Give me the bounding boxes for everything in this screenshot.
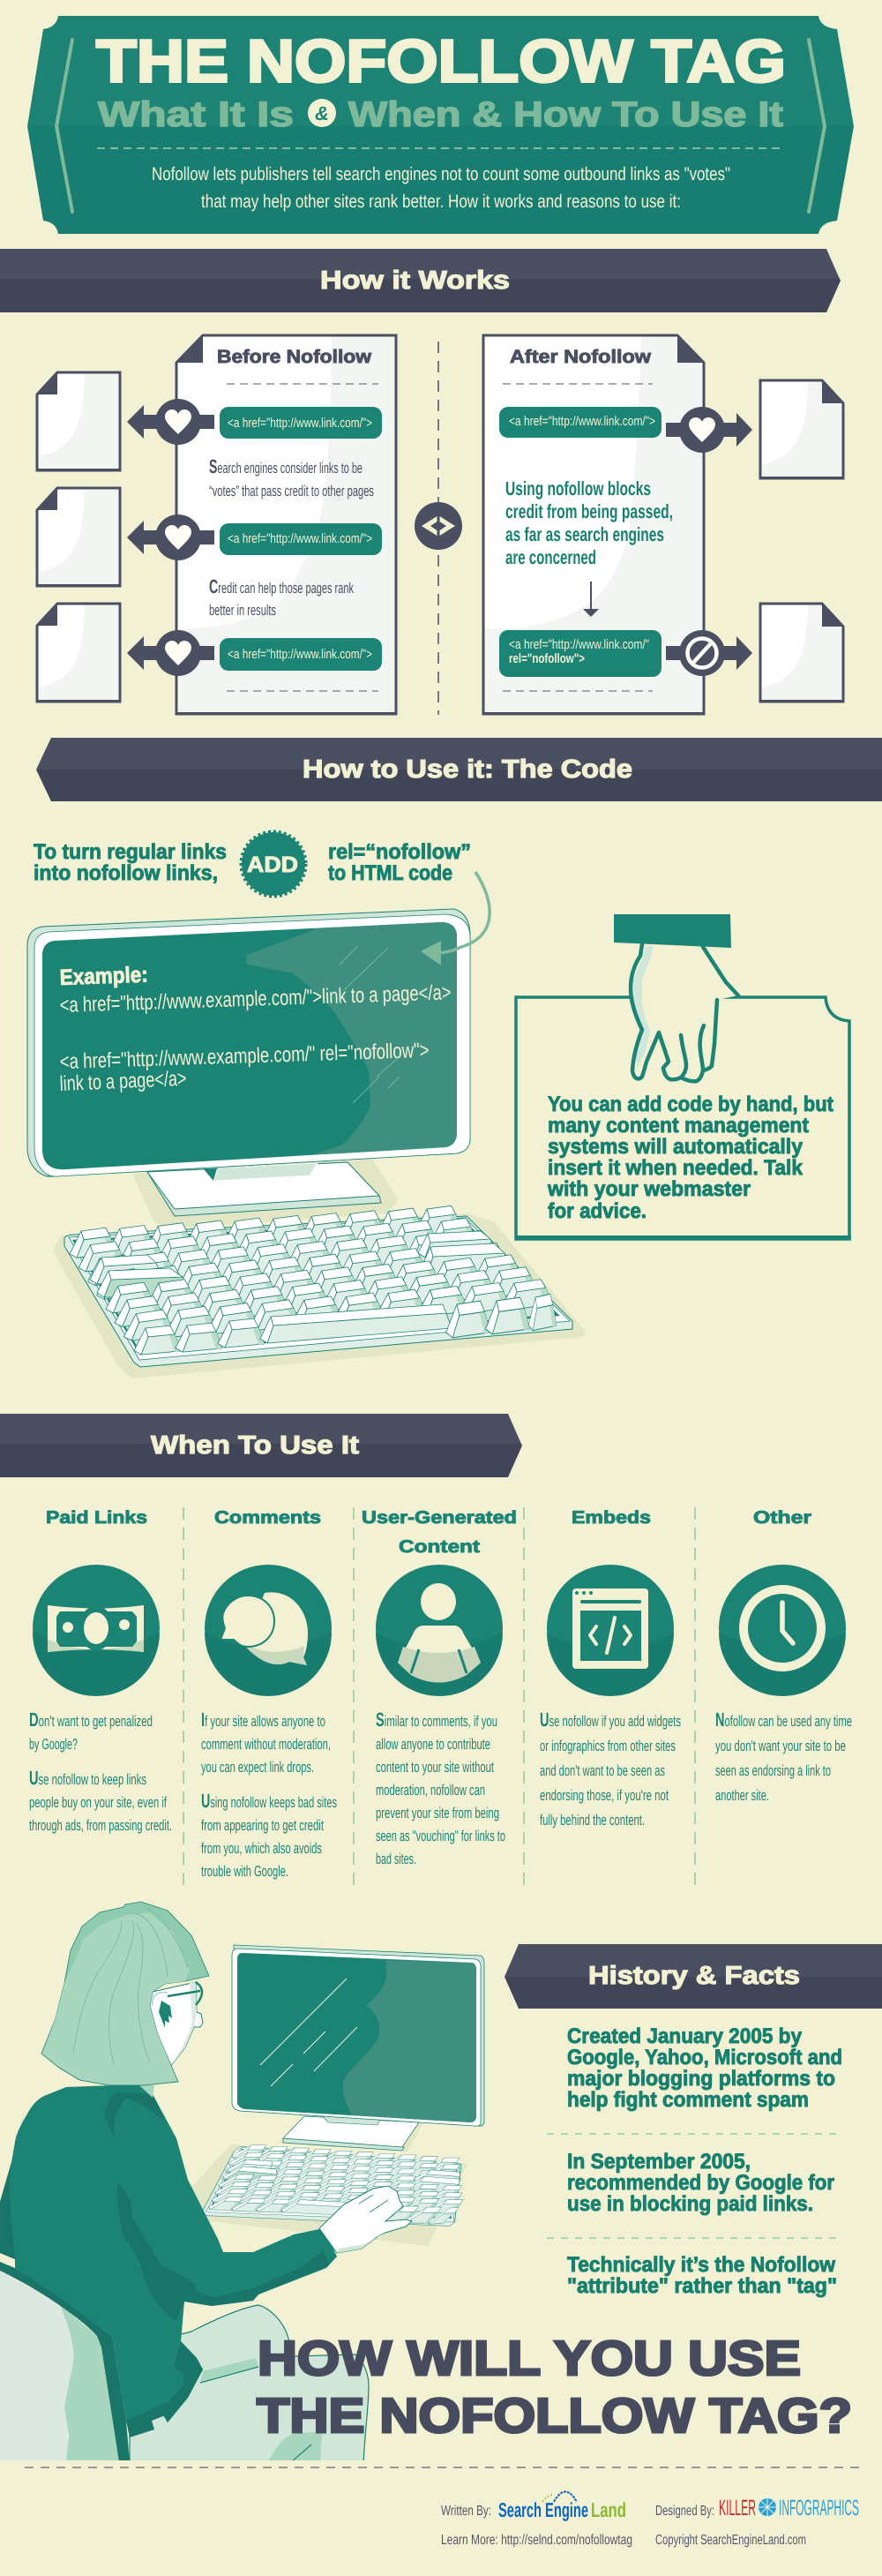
icon: money xyxy=(33,1565,160,1696)
fact 1: major blogging platforms to xyxy=(567,2067,835,2091)
description: Using nofollow keeps bad sites xyxy=(201,1790,337,1812)
column: comments xyxy=(201,1508,337,1880)
section band: History & Facts xyxy=(505,1944,882,2009)
panel: after nofollow xyxy=(482,335,705,715)
neck xyxy=(139,2085,154,2098)
explanation 1: “votes” that pass credit to other pages xyxy=(209,483,374,499)
torso and arm xyxy=(0,2084,337,2422)
icon: blocked arrow right xyxy=(666,630,752,676)
icon: hand xyxy=(614,914,738,1081)
heading: After Nofollow xyxy=(510,347,652,367)
code box 3: <a href="http://www.link.com/"> xyxy=(228,647,372,662)
fact 1: help fight comment spam xyxy=(567,2088,809,2112)
hair xyxy=(41,1902,209,2085)
intro text xyxy=(152,164,730,212)
small monitor xyxy=(232,1945,484,2152)
chair and legs xyxy=(0,2262,369,2467)
heading: Embeds xyxy=(572,1508,651,1528)
description: and don't want to be seen as xyxy=(540,1762,665,1779)
code box 1: <a href="http://www.link.com/"> xyxy=(228,416,372,431)
heading: Before Nofollow xyxy=(217,347,372,367)
section band: History & Facts: History & Facts xyxy=(588,1962,800,1990)
icon: embed window xyxy=(547,1565,674,1696)
subtitle: When & How To Use It xyxy=(348,95,783,134)
description xyxy=(29,1709,172,1834)
nofollow code box: rel="nofollow"> xyxy=(509,651,585,666)
explanation 2: Credit can help those pages rank xyxy=(209,575,354,597)
intro text: Nofollow lets publishers tell search engines not to count some outbound links as "votes" xyxy=(152,164,730,184)
fact 1 xyxy=(567,2024,842,2112)
description: you can expect link drops. xyxy=(201,1759,314,1776)
column: other xyxy=(715,1508,852,1804)
heading: Comments xyxy=(214,1508,321,1528)
keyboard xyxy=(53,1205,587,1378)
small keyboard xyxy=(163,2131,523,2246)
ampersand badge: & xyxy=(315,102,329,124)
icon: code comparison xyxy=(415,502,462,550)
logo: search engine land: Search Engine xyxy=(498,2498,588,2521)
explanation: credit from being passed, xyxy=(505,500,673,522)
footer credits xyxy=(441,2492,859,2548)
logo: search engine land: Land xyxy=(591,2498,626,2521)
fact 3: "attribute" rather than "tag" xyxy=(567,2274,837,2298)
learn more: Learn More: http://selnd.com/nofollowtag xyxy=(441,2533,632,2548)
column: embeds xyxy=(540,1508,681,1829)
description: content to your site without xyxy=(376,1759,494,1776)
section band: When To Use It: When To Use It xyxy=(151,1431,359,1460)
code box: <a href="http://www.link.com/"> xyxy=(509,414,655,429)
description: endorsing those, if you're not xyxy=(540,1787,669,1804)
note text: many content management xyxy=(548,1114,809,1138)
note text: insert it when needed. Talk xyxy=(548,1156,804,1180)
note text: You can add code by hand, but xyxy=(548,1093,833,1116)
subtitle: What It Is xyxy=(98,95,294,134)
fact 2: recommended by Google for xyxy=(567,2171,834,2195)
explanation: as far as search engines xyxy=(505,523,664,545)
section band: How it Works xyxy=(0,249,841,312)
heading xyxy=(362,1508,517,1557)
description xyxy=(540,1709,681,1829)
description: Use nofollow if you add widgets xyxy=(540,1709,681,1731)
icon: speech bubbles xyxy=(205,1565,332,1696)
description: people buy on your site, even if xyxy=(29,1794,167,1811)
note text: systems will automatically xyxy=(548,1135,804,1159)
ADD badge: ADD xyxy=(247,852,298,877)
description xyxy=(201,1709,337,1880)
logo: killer infographics xyxy=(719,2496,859,2520)
designed by: Designed By: xyxy=(655,2504,714,2519)
description: from you, which also avoids xyxy=(201,1840,322,1857)
nofollow code box xyxy=(499,630,662,677)
code example: <a href="http://www.example.com/">link to a page</a> xyxy=(59,980,452,1018)
curved arrow xyxy=(421,872,490,965)
title banner xyxy=(27,16,854,234)
code example: <a href="http://www.example.com/" rel="nofollow"> xyxy=(59,1039,430,1074)
explanation xyxy=(505,477,673,568)
face xyxy=(150,1982,203,2067)
icon: heart arrow 3 xyxy=(127,630,214,676)
code example: Example: xyxy=(59,963,148,990)
nofollow code box: <a href="http://www.link.com/" xyxy=(509,637,649,652)
description: comment without moderation, xyxy=(201,1736,331,1753)
intro text: that may help other sites rank better. How it works and reasons to use it: xyxy=(201,192,681,212)
instruction text left: into nofollow links, xyxy=(34,861,218,885)
code box xyxy=(499,407,662,438)
description: by Google? xyxy=(29,1736,78,1753)
fact 1: Google, Yahoo, Microsoft and xyxy=(567,2046,842,2069)
note text: with your webmaster xyxy=(547,1177,751,1201)
screen xyxy=(42,922,457,1169)
stand xyxy=(278,2114,423,2152)
subtitle xyxy=(98,95,783,134)
copyright: Copyright SearchEngineLand.com xyxy=(655,2533,806,2548)
callout: hand with note xyxy=(515,914,851,1240)
linked page right 2 xyxy=(759,604,844,702)
hand xyxy=(319,2186,412,2253)
instruction text left: To turn regular links xyxy=(34,840,227,864)
stand xyxy=(132,1156,399,1228)
ampersand badge xyxy=(308,99,336,127)
code box 1 xyxy=(220,407,382,439)
arrow down xyxy=(583,582,599,617)
description: bad sites. xyxy=(376,1851,416,1867)
instruction text right: rel=“nofollow” xyxy=(328,840,471,864)
sweater folds xyxy=(0,2092,329,2437)
code example: link to a page</a> xyxy=(59,1067,187,1096)
monitor xyxy=(27,909,470,1228)
linked page 2 xyxy=(36,488,121,587)
instruction text right xyxy=(328,840,471,885)
explanation 2: better in results xyxy=(209,602,276,619)
description: or infographics from other sites xyxy=(540,1738,676,1754)
section band: When To Use It xyxy=(0,1414,522,1477)
heading: User-Generated xyxy=(362,1508,517,1528)
description: Use nofollow to keep links xyxy=(29,1767,146,1789)
description: allow anyone to contribute xyxy=(376,1736,490,1753)
logo: killer infographics: KILLER xyxy=(719,2496,756,2520)
code box 3 xyxy=(220,638,382,671)
explanation: are concerned xyxy=(505,546,596,568)
section band: How to Use it: How to Use it: The Code xyxy=(303,755,632,784)
glasses xyxy=(168,1982,202,2005)
explanation 2 xyxy=(209,575,354,619)
closing question: HOW WILL YOU USE xyxy=(258,2331,801,2385)
written by: Written By: xyxy=(441,2504,491,2519)
explanation 1 xyxy=(209,455,374,499)
fact 3 xyxy=(567,2253,837,2298)
screen xyxy=(237,1953,476,2122)
fact 2: use in blocking paid links. xyxy=(567,2192,813,2216)
column: paid links xyxy=(29,1508,172,1834)
panel: before nofollow xyxy=(176,335,397,715)
section band: How it Works: How it Works xyxy=(320,267,510,295)
heading: Other xyxy=(753,1508,811,1528)
description: trouble with Google. xyxy=(201,1863,288,1880)
code box 2: <a href="http://www.link.com/"> xyxy=(228,531,372,546)
illustration: woman at computer xyxy=(0,1902,412,2467)
linked page 3 xyxy=(36,604,121,702)
description: from appearing to get credit xyxy=(201,1817,324,1834)
icon: heart arrow right xyxy=(666,407,752,453)
note text xyxy=(547,1093,833,1223)
fact 1: Created January 2005 by xyxy=(567,2024,803,2048)
explanation 1: Search engines consider links to be xyxy=(209,455,363,477)
linked page right 1 xyxy=(759,380,844,479)
description: another site. xyxy=(715,1787,769,1804)
explanation: Using nofollow blocks xyxy=(505,477,651,499)
description: fully behind the content. xyxy=(540,1812,645,1829)
description: If your site allows anyone to xyxy=(201,1709,325,1731)
code example xyxy=(59,963,452,1096)
description: moderation, nofollow can xyxy=(376,1782,485,1799)
icon: person xyxy=(376,1565,503,1696)
code box 2 xyxy=(220,523,382,555)
linked page 1 xyxy=(36,372,121,471)
fact 2: In September 2005, xyxy=(567,2150,751,2174)
ADD badge xyxy=(241,831,306,897)
icon: heart arrow 1 xyxy=(127,399,214,445)
heading: Paid Links xyxy=(46,1508,147,1528)
icon: heart arrow 2 xyxy=(127,514,214,560)
description: Similar to comments, if you xyxy=(376,1709,497,1731)
description xyxy=(715,1709,852,1804)
closing question: THE NOFOLLOW TAG? xyxy=(257,2388,852,2443)
instruction text right: to HTML code xyxy=(328,861,452,885)
note text: for advice. xyxy=(548,1199,647,1223)
description: prevent your site from being xyxy=(376,1805,499,1821)
icon: clock xyxy=(719,1565,846,1696)
fact 3: Technically it’s the Nofollow xyxy=(567,2253,835,2277)
section band: How to Use it xyxy=(36,738,882,801)
title: THE NOFOLLOW TAG xyxy=(96,28,786,95)
column: user-generated content xyxy=(362,1508,517,1867)
instruction text left xyxy=(34,840,227,885)
description: Don't want to get penalized xyxy=(29,1709,153,1731)
description xyxy=(376,1709,505,1867)
fact 2 xyxy=(567,2150,834,2216)
heading: Content xyxy=(399,1537,480,1557)
closing question xyxy=(257,2331,852,2443)
description: through ads, from passing credit. xyxy=(29,1817,172,1834)
description: seen as "vouching" for links to xyxy=(376,1828,505,1844)
